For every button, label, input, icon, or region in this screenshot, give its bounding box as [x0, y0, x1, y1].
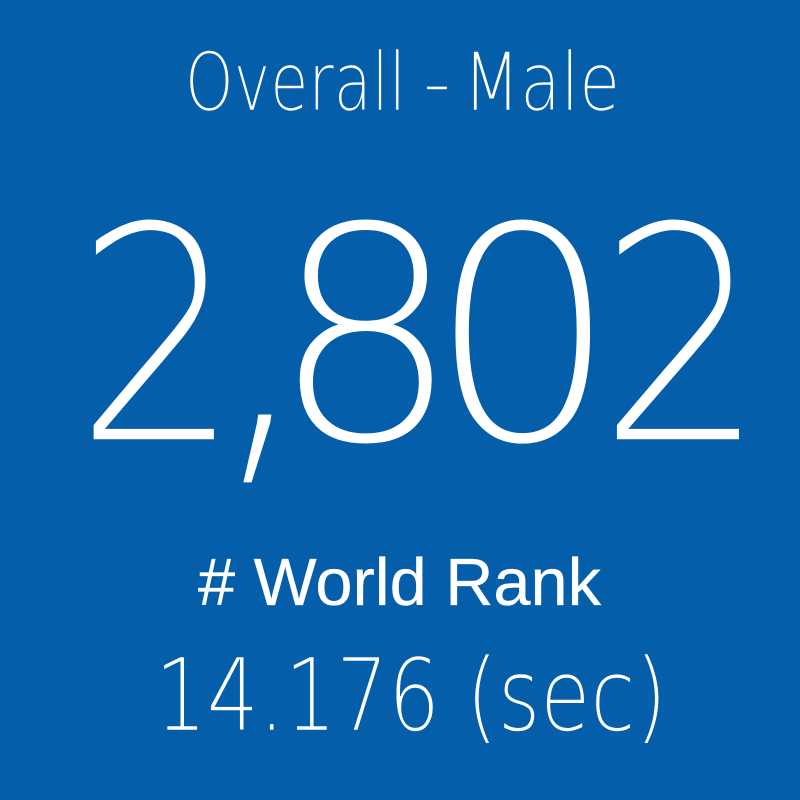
big number: world rank value: , [206, 85, 354, 529]
title [185, 36, 620, 129]
title: - [423, 36, 451, 129]
big number: world rank value: 8 [271, 164, 461, 511]
time value: 14.176 (sec) [155, 637, 667, 754]
label: world rank: # World Rank [198, 545, 601, 620]
title: Overall [185, 36, 406, 129]
big number: world rank value [75, 85, 766, 529]
big number: world rank value: 0 [428, 165, 619, 511]
title: Male [463, 36, 620, 129]
big number: world rank value: 2 [598, 165, 766, 511]
big number: world rank value: 2 [75, 163, 241, 510]
